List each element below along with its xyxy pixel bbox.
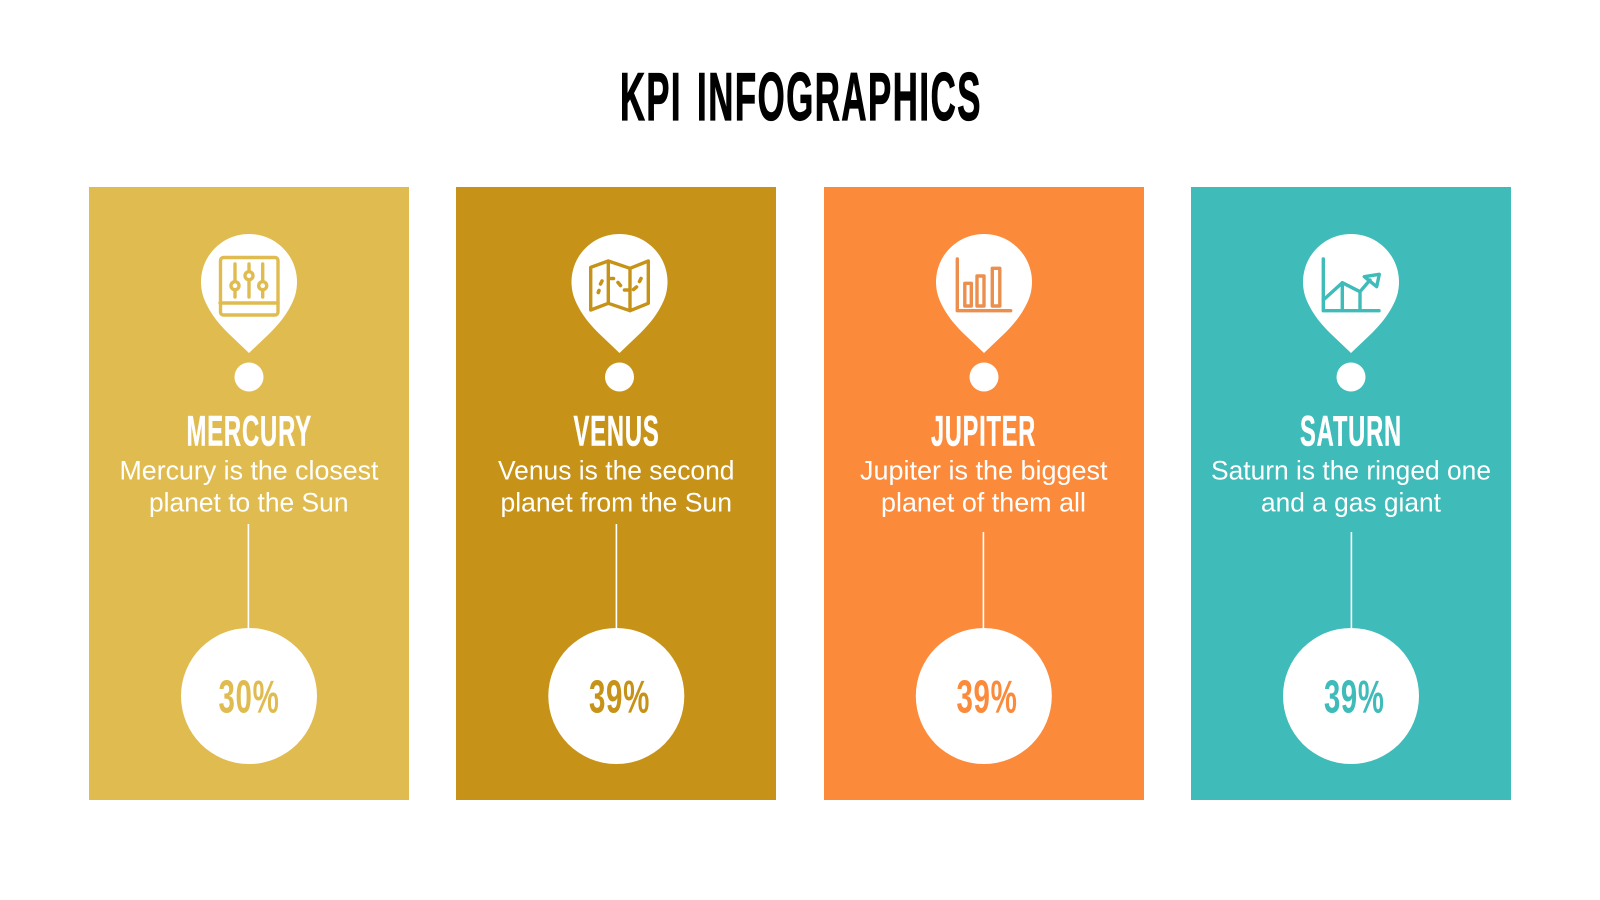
description: Mercury: Mercury is the closest xyxy=(120,456,379,486)
value: Saturn: 39% xyxy=(1324,670,1384,722)
icon: sliders xyxy=(220,258,278,315)
location pin: Venus xyxy=(572,234,668,353)
location pin: Saturn xyxy=(1303,234,1399,353)
connector line: Saturn xyxy=(1351,532,1352,629)
connector line: Venus xyxy=(616,524,617,629)
description: Jupiter: planet of them all xyxy=(881,487,1086,517)
value circle: Venus xyxy=(548,628,684,764)
description: Saturn xyxy=(1211,456,1491,517)
panel background: Venus xyxy=(456,187,776,800)
description: Venus: Venus is the second xyxy=(498,456,734,486)
description: Jupiter xyxy=(860,456,1108,517)
title xyxy=(620,59,982,135)
value circle: Mercury xyxy=(181,628,317,764)
connector line: Mercury xyxy=(248,524,249,629)
panel: Saturn xyxy=(1191,187,1511,800)
value circle: Jupiter xyxy=(916,628,1052,764)
value circle: Saturn xyxy=(1283,628,1419,764)
pin dot: Mercury xyxy=(234,362,264,392)
icon: folded map xyxy=(591,261,648,311)
location pin: Mercury xyxy=(201,234,297,353)
description: Venus xyxy=(498,456,734,517)
value: Jupiter: 39% xyxy=(956,670,1018,722)
description: Mercury xyxy=(120,456,379,517)
description: Saturn: and a gas giant xyxy=(1261,487,1441,517)
description: Venus: planet from the Sun xyxy=(500,487,732,517)
pin dot: Jupiter xyxy=(970,362,998,392)
connector line: Jupiter xyxy=(983,532,984,629)
icon: bar chart xyxy=(957,259,1011,311)
heading: Jupiter: JUPITER xyxy=(931,408,1036,456)
panel: Jupiter xyxy=(824,187,1144,800)
value: Mercury: 30% xyxy=(218,670,280,722)
pin dot: Saturn xyxy=(1336,362,1366,392)
description: Mercury: planet to the Sun xyxy=(149,487,348,517)
heading: Venus: VENUS xyxy=(574,408,660,456)
title: INFOGRAPHICS xyxy=(697,59,982,135)
title: KPI xyxy=(620,59,682,135)
panel: Venus xyxy=(456,187,776,800)
heading: Saturn: SATURN xyxy=(1300,408,1402,456)
icon: growth chart xyxy=(1323,259,1379,311)
panel: Mercury xyxy=(89,187,409,800)
description: Jupiter: Jupiter is the biggest xyxy=(860,456,1108,486)
location pin: Jupiter xyxy=(936,234,1032,353)
panel background: Saturn xyxy=(1191,187,1511,800)
value: Venus: 39% xyxy=(589,670,650,722)
description: Saturn: Saturn is the ringed one xyxy=(1211,456,1491,486)
panel background: Jupiter xyxy=(824,187,1144,800)
pin dot: Venus xyxy=(605,362,634,392)
panel background: Mercury xyxy=(89,187,409,800)
heading: Mercury: MERCURY xyxy=(186,408,312,456)
